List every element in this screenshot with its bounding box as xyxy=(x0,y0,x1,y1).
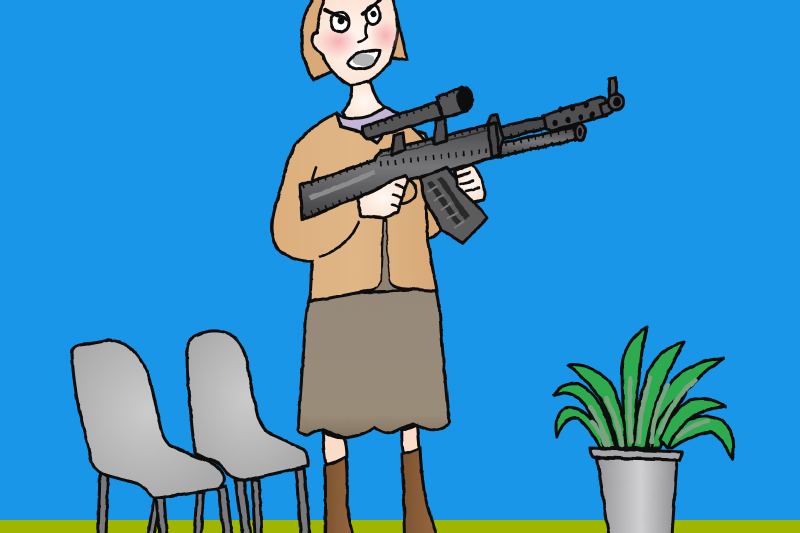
scope tube xyxy=(362,102,442,139)
hand on magazine xyxy=(455,165,484,202)
chair right xyxy=(187,331,310,533)
pot rim xyxy=(590,448,682,460)
muzzle xyxy=(600,94,624,115)
eyebrows xyxy=(325,0,380,20)
sleeve crease xyxy=(312,167,359,257)
barrel band xyxy=(488,123,499,157)
chair left xyxy=(72,340,232,533)
collar xyxy=(337,107,398,143)
upper barrel xyxy=(495,117,546,139)
leg left xyxy=(323,431,347,465)
scope objective xyxy=(437,87,473,118)
blush cheek left xyxy=(316,25,360,59)
ground xyxy=(0,520,800,533)
pot body xyxy=(597,458,677,533)
boot right xyxy=(402,448,437,533)
leg right xyxy=(402,425,419,455)
lower barrel xyxy=(492,124,585,157)
front sight post xyxy=(609,78,617,96)
perforated barrel shroud xyxy=(542,97,607,131)
scope mounts xyxy=(392,118,447,155)
chair legs right xyxy=(235,468,310,533)
nose xyxy=(358,24,367,42)
eye left xyxy=(331,12,349,32)
rifle xyxy=(300,78,624,243)
plant leaves xyxy=(554,327,734,459)
skirt showing through cardigan opening xyxy=(374,222,398,290)
hand on grip xyxy=(358,176,408,218)
cardigan xyxy=(272,113,437,301)
hair xyxy=(302,0,407,80)
skirt xyxy=(298,288,449,437)
hand fingers left xyxy=(392,185,405,207)
woman xyxy=(272,0,449,533)
trigger guard xyxy=(398,180,416,204)
chair legs left xyxy=(98,472,232,533)
magazine xyxy=(420,167,487,243)
potted plant xyxy=(554,327,734,533)
leaf highlights xyxy=(590,378,708,445)
mouth xyxy=(348,50,380,69)
eye right xyxy=(366,6,380,24)
neck xyxy=(343,82,386,122)
cardigan back right sleeve xyxy=(400,130,441,240)
face xyxy=(312,0,398,85)
receiver and stock xyxy=(300,115,503,220)
boot left xyxy=(325,457,353,533)
blush cheek right xyxy=(369,19,401,53)
